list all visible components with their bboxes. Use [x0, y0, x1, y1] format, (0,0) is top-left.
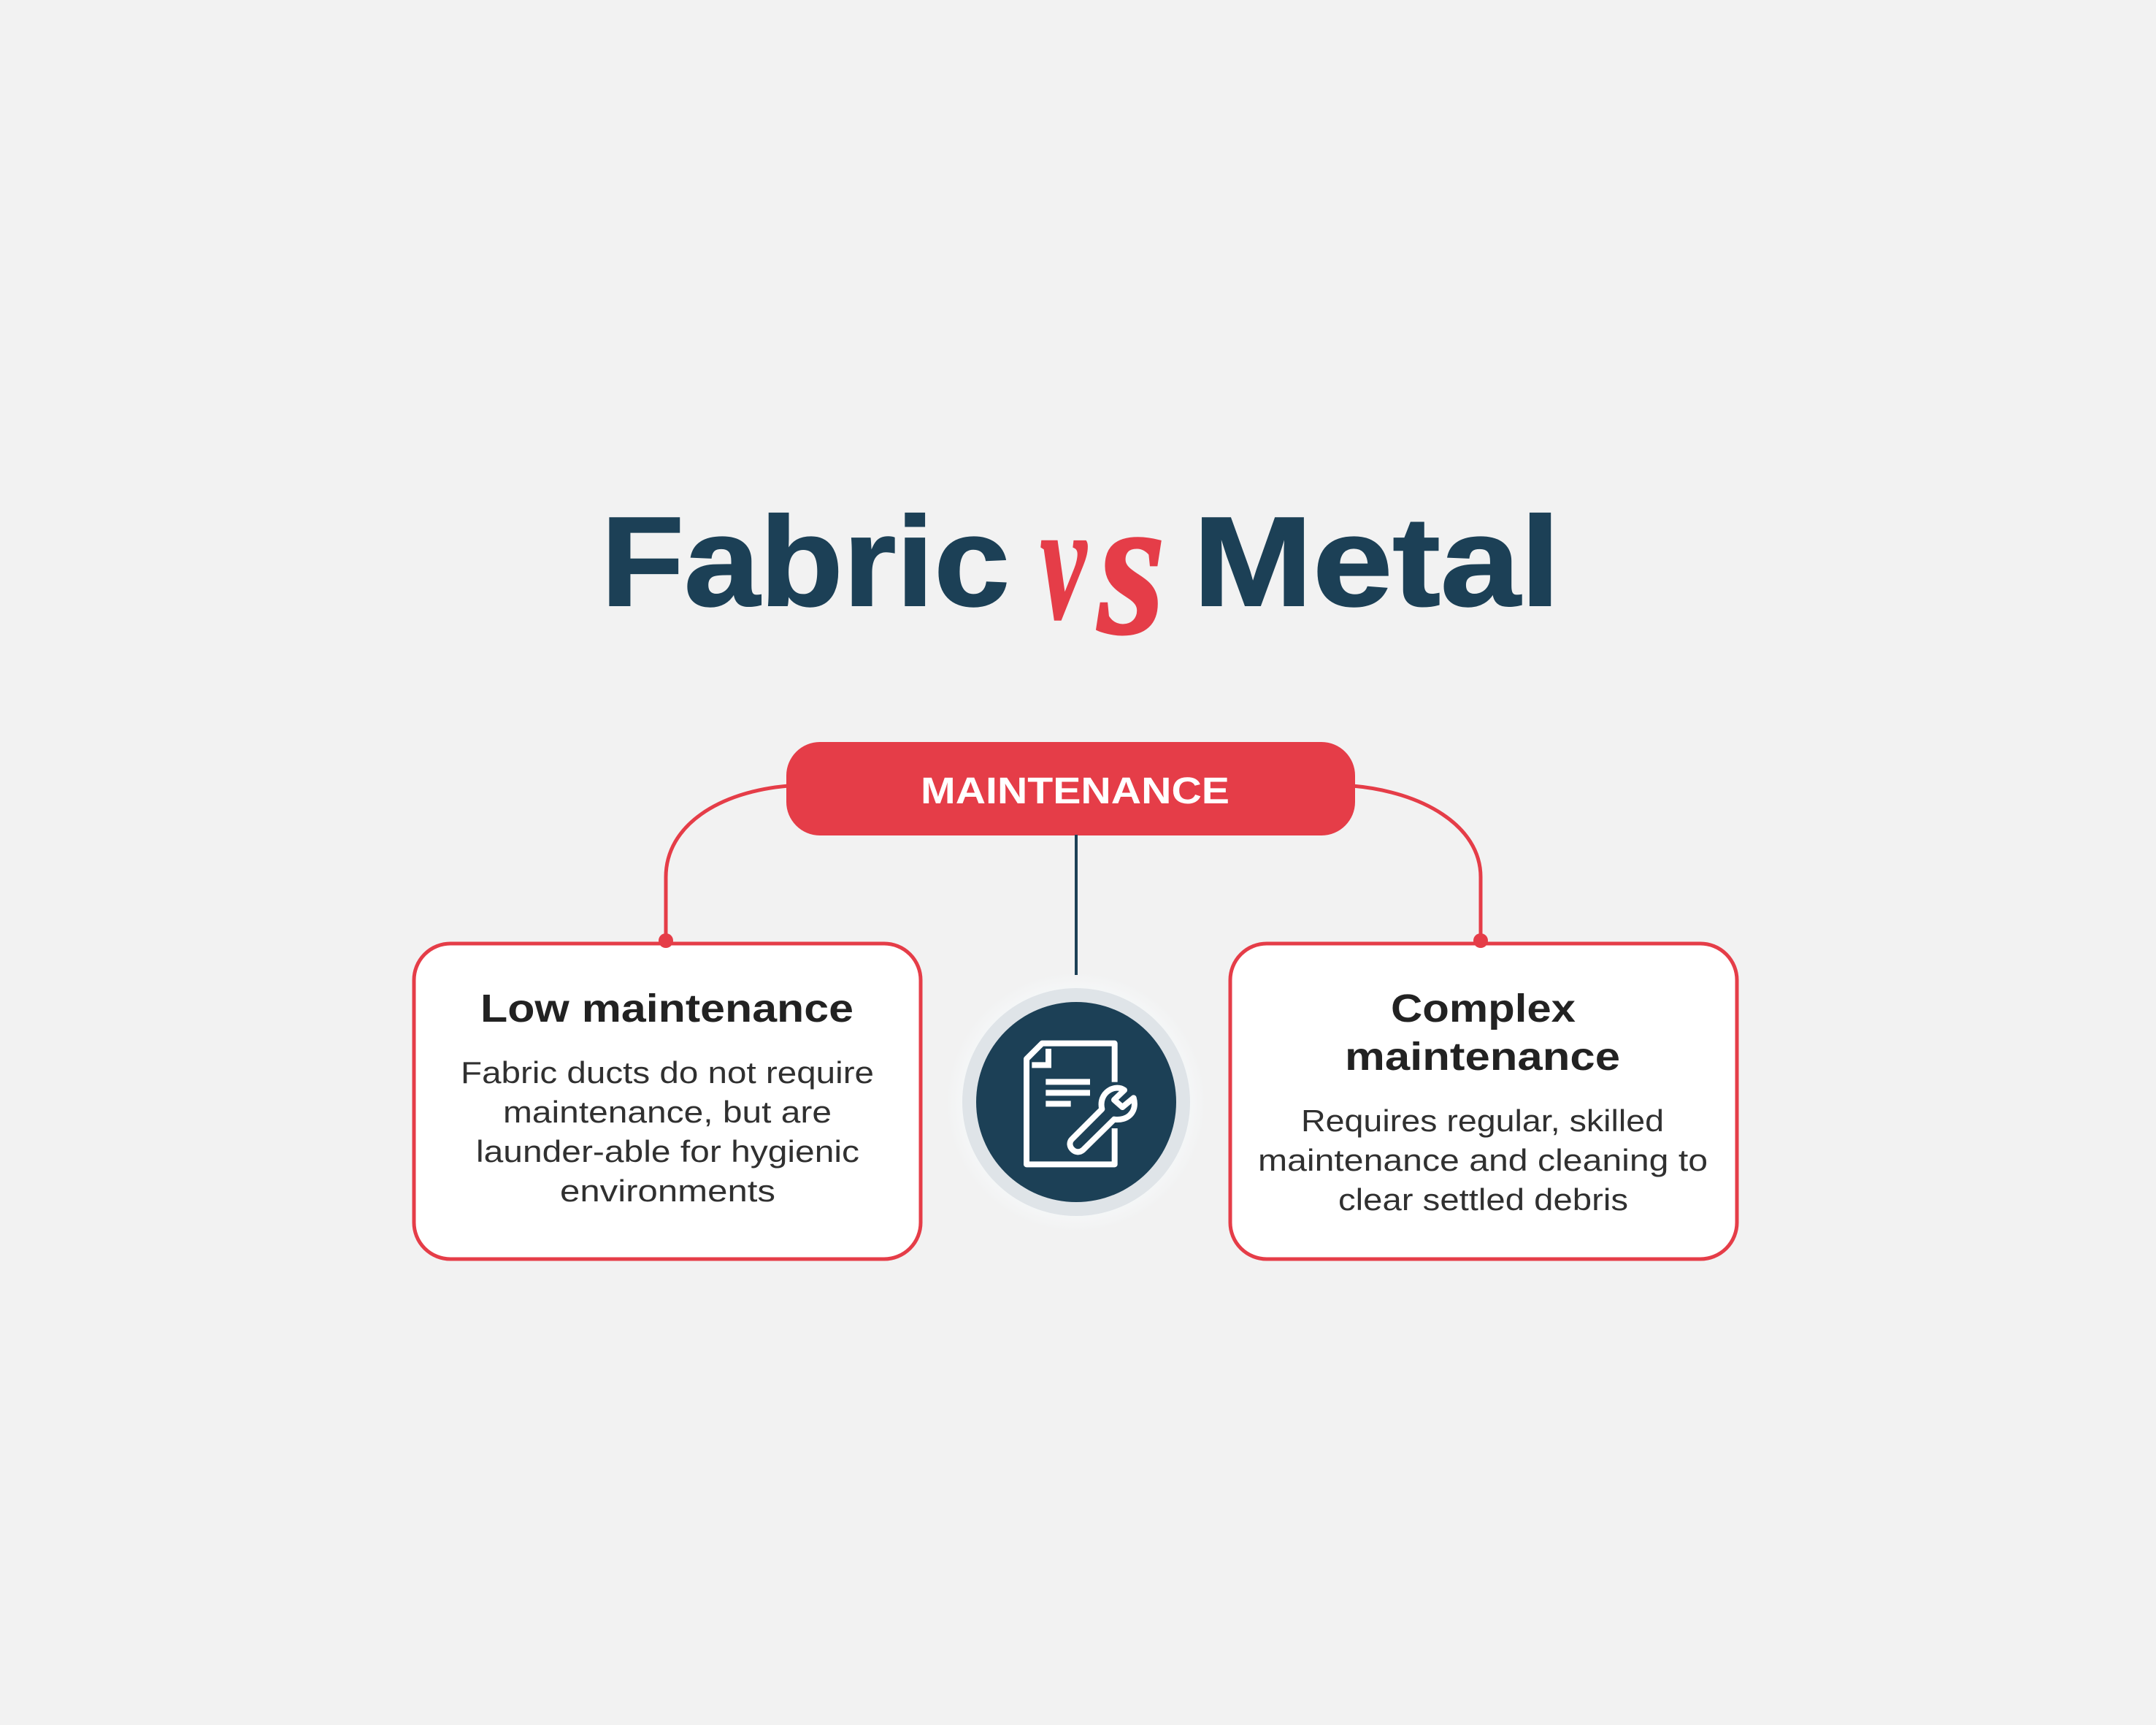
card body text: launder-able for hygienic: [476, 1134, 859, 1169]
connector: heading to icon: [1075, 835, 1078, 975]
card body text: maintenance and cleaning to: [1258, 1143, 1708, 1177]
title word: vs: s: [1095, 455, 1165, 676]
card body text: maintenance, but are: [503, 1095, 832, 1129]
title word: vs: [1040, 455, 1165, 676]
card body text: Fabric ducts do not require: [461, 1055, 874, 1090]
card heading: Low maintenance: [480, 987, 853, 1030]
card body text: [1258, 1104, 1708, 1217]
heading pill: maintenance: MAINTENANCE: [921, 770, 1229, 811]
connector: heading to left card: [659, 786, 789, 948]
title word: vs: v: [1040, 470, 1087, 654]
heading pill: maintenance: [786, 742, 1355, 835]
panel: metal complex maintenance: [1230, 944, 1737, 1259]
card body text: Requires regular, skilled: [1301, 1104, 1664, 1138]
panel: fabric low maintenance: [414, 944, 921, 1259]
title word: Metal: Metal: [1193, 490, 1560, 632]
title: [601, 455, 1560, 676]
card body text: environments: [560, 1174, 775, 1208]
icon: document with wrench: [946, 972, 1206, 1232]
card body text: [461, 1055, 874, 1208]
connector: heading to right card: [1352, 786, 1488, 948]
title word: Fabric: Fabric: [601, 490, 1010, 632]
card heading: [1345, 987, 1620, 1079]
card heading: maintenance: [1345, 1035, 1620, 1079]
card body text: clear settled debris: [1338, 1182, 1628, 1217]
card heading: Complex: [1391, 987, 1576, 1030]
